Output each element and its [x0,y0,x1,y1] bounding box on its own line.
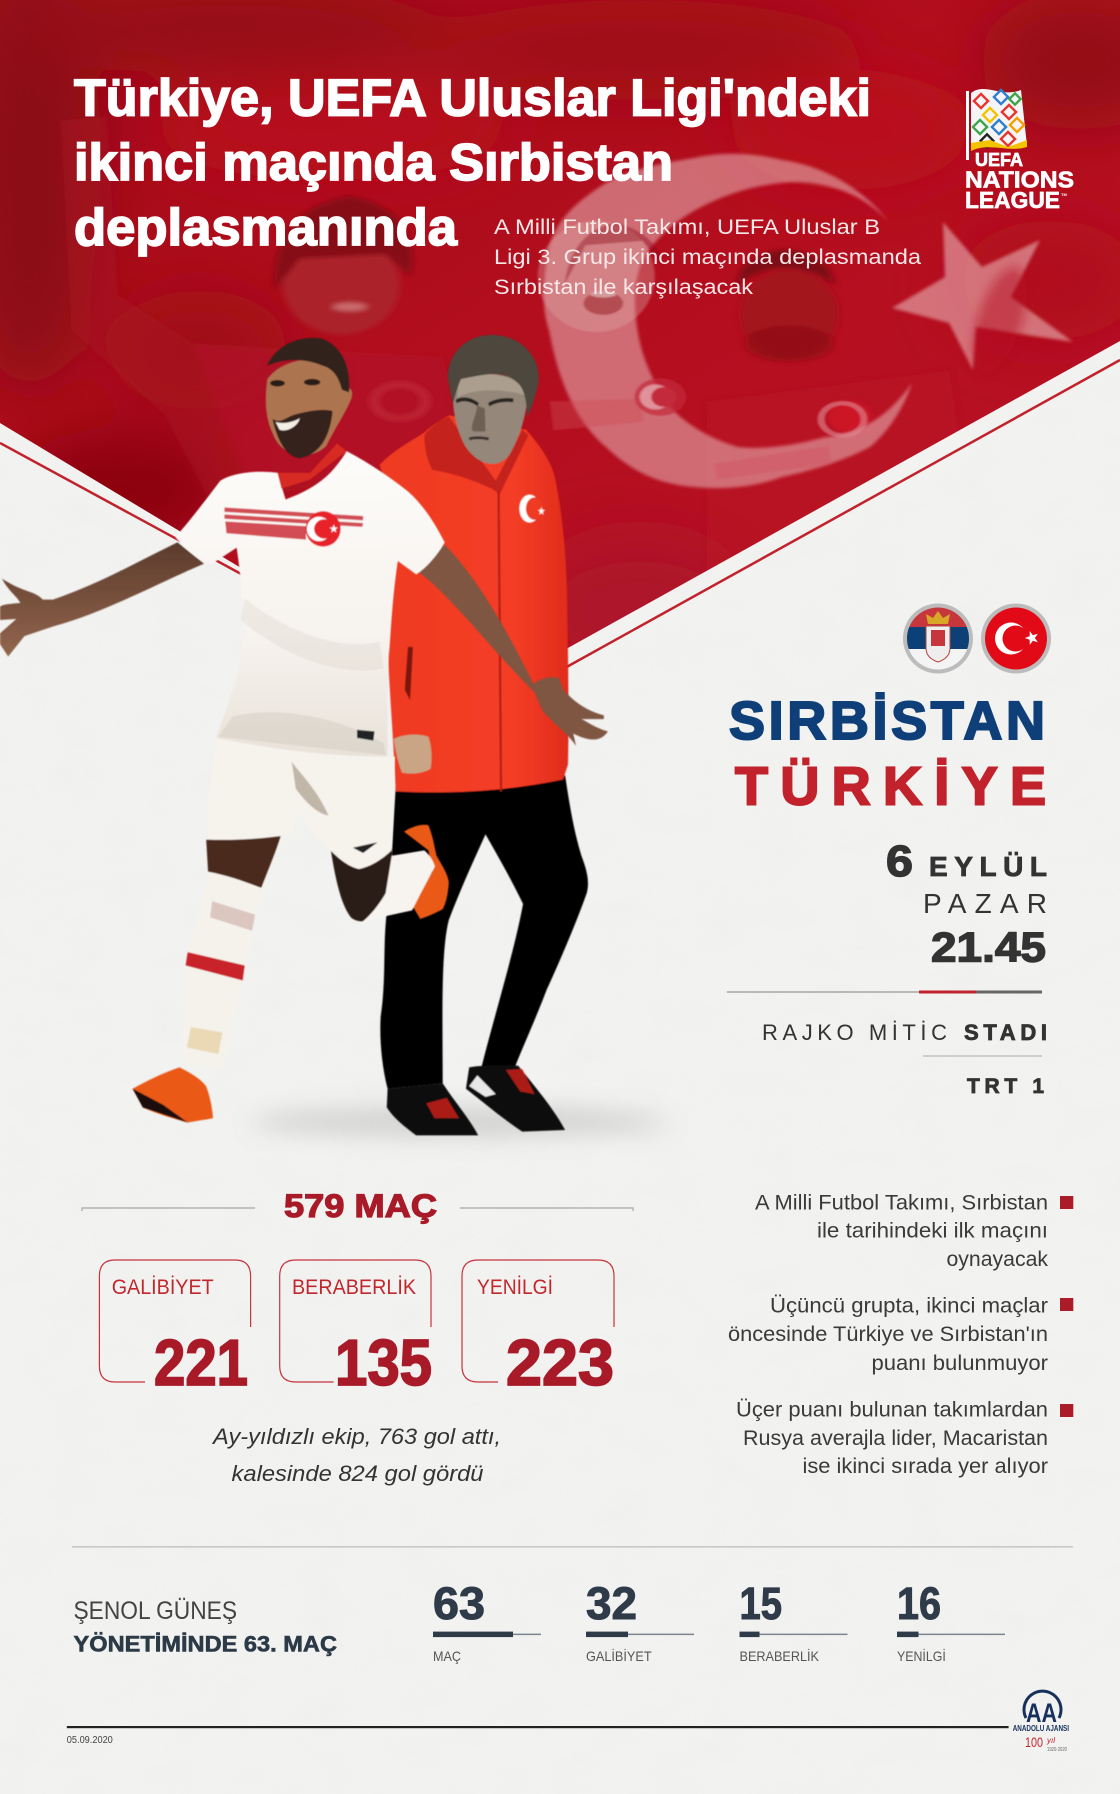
coach heading: ŞENOL GÜNEŞ [74,1597,237,1625]
goals note: Ay-yıldızlı ekip, 763 gol attı, [211,1424,501,1449]
footer rule [67,1726,1009,1728]
bullet 1: A Milli Futbol Takımı, Sırbistan [755,1191,1048,1214]
flag star [892,222,1073,370]
coach stat: losses [897,1578,1005,1664]
coach stat: wins [586,1578,694,1664]
bullet 1: ile tarihindeki ilk maçını [817,1220,1048,1243]
subtitle: Ligi 3. Grup ikinci maçında deplasmanda [494,246,921,269]
bullet 2: puanı bulunmuyor [872,1352,1048,1375]
logo: Anadolu Ajansi: 1920-2020 [1047,1747,1067,1753]
bullet 1 [755,1191,1073,1271]
section rule [72,1546,1073,1548]
stat card: draws: 135 [335,1326,432,1399]
footballer figure [0,338,608,1122]
coach stat: wins: GALİBİYET [586,1647,652,1664]
bullet 3 [736,1399,1073,1478]
bullet list [728,1191,1073,1478]
broadcaster: TRT 1 [967,1075,1044,1098]
bullet 3: ise ikinci sırada yer alıyor [802,1455,1048,1478]
stat card: wins: 221 [154,1326,248,1399]
coach stat: matches: 63 [433,1578,485,1629]
logo: UEFA Nations League: NATIONS [965,167,1074,193]
subtitle: A Milli Futbol Takımı, UEFA Uluslar B [494,216,880,239]
match date and time: 6 [886,837,913,886]
title: Türkiye, UEFA Uluslar Ligi'ndeki [74,70,871,128]
team names: TÜRKİYE [735,756,1046,816]
match date and time [886,837,1047,970]
coach stat: losses: YENİLGİ [897,1647,946,1664]
match date and time: 21.45 [931,924,1046,970]
venue: STADI [964,1020,1047,1045]
diagonal accent lines [0,360,1120,669]
coach heading [74,1597,337,1657]
ground shadow [250,1108,670,1136]
bullet 1: oynayacak [946,1248,1048,1271]
coach stat: wins: 32 [586,1578,637,1629]
ghost player right [711,248,960,568]
coach figure [379,335,588,1135]
coach stat: matches [433,1578,541,1664]
title [74,70,871,257]
logo: UEFA Nations League [965,89,1074,213]
match date and time: PAZAR [923,888,1047,919]
match date and time: EYLÜL [929,851,1047,882]
logo: Anadolu Ajansi: AA [1026,1698,1057,1728]
logo: UEFA Nations League: LEAGUE [965,187,1060,213]
team names [729,691,1046,816]
stat card: draws: BERABERLİK [292,1276,416,1299]
ghost player centre [538,221,864,479]
coach stat: draws: BERABERLİK [740,1647,820,1664]
date: 05.09.2020 [67,1735,113,1746]
team names: SIRBİSTAN [729,691,1045,751]
divider: date and venue [727,990,1042,994]
icon: Serbia flag badge [903,604,973,674]
logo: Anadolu Ajansi: ANADOLU AJANSI [1013,1724,1069,1733]
stat card: draws [280,1260,432,1399]
divider: venue and channel [923,1056,1042,1057]
logo: UEFA Nations League: UEFA [975,150,1023,170]
coach stat: matches: MAÇ [433,1648,461,1664]
venue [762,1020,1047,1045]
bullet 2 [728,1295,1073,1375]
heading: 579 matches: 579 MAÇ [284,1188,437,1224]
stat card: losses [462,1260,614,1399]
logo: Anadolu Ajansi [1013,1691,1069,1753]
bullet 3: Rusya averajla lider, Macaristan [743,1427,1048,1450]
coach heading: YÖNETİMİNDE 63. MAÇ [74,1632,337,1657]
red flag banner with ghosted players [0,0,1120,720]
bullet 2: öncesinde Türkiye ve Sırbistan'ın [728,1323,1048,1346]
heading: 579 matches [82,1188,633,1224]
stat card: wins [99,1260,251,1399]
stat card: wins: GALİBİYET [112,1276,214,1299]
goals note: kalesinde 824 gol gördü [232,1461,484,1486]
players photo cut-out [0,335,670,1136]
logo: Anadolu Ajansi: 100 [1025,1734,1043,1750]
logo: UEFA Nations League: TM [1061,192,1067,197]
coach stat: draws [740,1578,848,1664]
ghost player left [62,120,448,480]
icon: Türkiye flag badge [981,604,1051,674]
bullet 2: Üçüncü grupta, ikinci maçlar [770,1295,1048,1318]
flag crescent [544,154,912,488]
logo: Anadolu Ajansi: yıl [1046,1736,1055,1745]
title: deplasmanında [74,199,458,257]
coach stat: losses: 16 [897,1578,941,1629]
subtitle [494,216,921,299]
bullet 3: Üçer puanı bulunan takımlardan [736,1399,1048,1422]
subtitle: Sırbistan ile karşılaşacak [494,276,754,299]
goals note [211,1424,501,1486]
venue: RAJKO MİTİC [762,1020,947,1045]
stat card: losses: 223 [506,1326,614,1399]
title: ikinci maçında Sırbistan [74,134,673,192]
stat card: losses: YENİLGİ [477,1276,553,1299]
coach stat: draws: 15 [740,1578,782,1629]
